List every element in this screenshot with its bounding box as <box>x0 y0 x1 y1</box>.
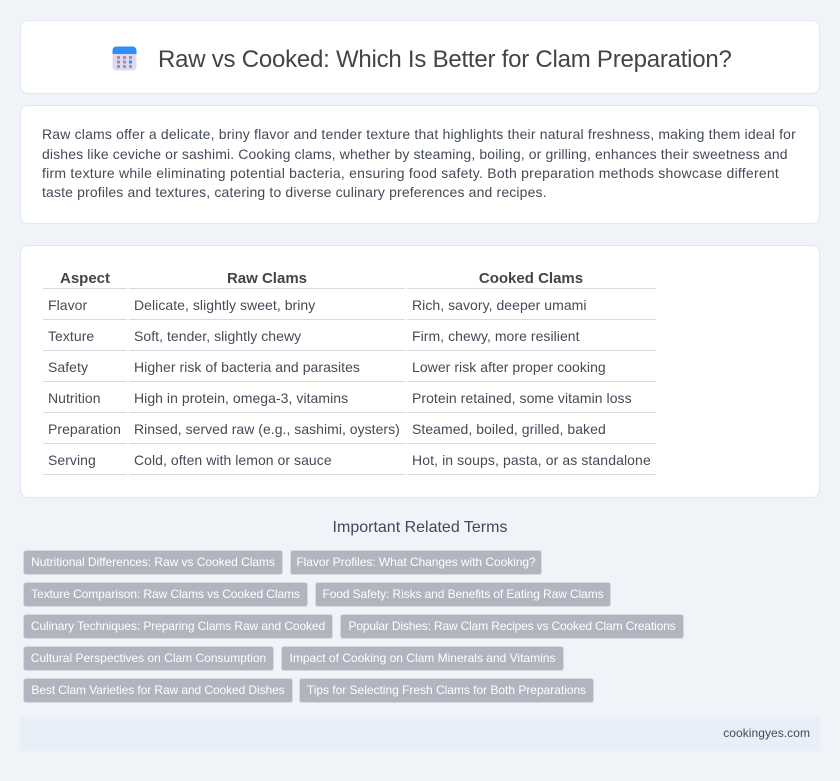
table row: flavor: Delicate, slightly sweet, briny <box>134 297 315 313</box>
table row: texture <box>48 328 580 344</box>
header panel <box>20 20 820 94</box>
tag: Tips for Selecting Fresh Clams for Both Preparations <box>307 683 586 697</box>
tag <box>290 550 542 575</box>
table row: texture: Texture <box>48 328 94 344</box>
intro paragraph: dishes like ceviche or sashimi. Cooking clams, whether by steaming, boiling, or grilling, enhances their sweetness and <box>42 146 788 162</box>
table row: texture: Soft, tender, slightly chewy <box>134 328 301 344</box>
tag <box>315 582 611 607</box>
table row: serving: Serving <box>48 452 96 468</box>
tag: Impact of Cooking on Clam Minerals and Vitamins <box>290 651 555 665</box>
tag: Popular Dishes: Raw Clam Recipes vs Cooked Clam Creations <box>348 619 676 633</box>
table row: nutrition <box>48 390 632 406</box>
table row: safety: Higher risk of bacteria and parasites <box>134 359 360 375</box>
tag: Food Safety: Risks and Benefits of Eating Raw Clams <box>322 587 604 601</box>
tag <box>23 582 308 607</box>
intro paragraph: firm texture while eliminating potential bacteria, ensuring food safety. Both preparation methods showcase different <box>42 165 779 181</box>
tag <box>23 678 293 703</box>
tag: Cultural Perspectives on Clam Consumption <box>31 651 266 665</box>
table header: Cooked Clams <box>479 270 583 287</box>
table row: safety <box>48 359 606 375</box>
tag <box>281 646 564 671</box>
table row: nutrition: High in protein, omega-3, vitamins <box>134 390 348 406</box>
intro paragraph: Raw clams offer a delicate, briny flavor and tender texture that highlights their natural freshness, making them ideal for <box>42 126 796 142</box>
table row: nutrition: Protein retained, some vitamin loss <box>412 390 632 406</box>
tag: Flavor Profiles: What Changes with Cooking? <box>296 555 536 569</box>
table row: preparation: Preparation <box>48 421 121 437</box>
tag: Texture Comparison: Raw Clams vs Cooked Clams <box>31 587 300 601</box>
tag <box>23 550 283 575</box>
tag list <box>23 550 684 703</box>
related terms heading: Important Related Terms <box>333 519 507 536</box>
table row: safety: Safety <box>48 359 88 375</box>
footer bar <box>20 717 820 751</box>
table row: flavor: Rich, savory, deeper umami <box>412 297 587 313</box>
table row: safety: Lower risk after proper cooking <box>412 359 606 375</box>
table row: preparation: Steamed, boiled, grilled, baked <box>412 421 606 437</box>
title: Raw vs Cooked: Which Is Better for Clam Preparation? <box>158 46 732 73</box>
tag: Best Clam Varieties for Raw and Cooked Dishes <box>31 683 285 697</box>
icon: calendar <box>112 46 136 70</box>
intro paragraph: taste profiles and textures, catering to diverse culinary preferences and recipes. <box>42 184 547 200</box>
tag: Nutritional Differences: Raw vs Cooked Clams <box>31 555 275 569</box>
panel: comparison table <box>20 245 820 498</box>
tag <box>299 678 594 703</box>
tag <box>23 646 274 671</box>
table row: flavor <box>48 297 587 313</box>
table header: Raw Clams <box>227 270 307 287</box>
tag: Culinary Techniques: Preparing Clams Raw and Cooked <box>31 619 325 633</box>
intro paragraph <box>42 126 796 200</box>
table header <box>60 270 583 287</box>
tag <box>340 614 684 639</box>
tag <box>23 614 333 639</box>
table header: Aspect <box>60 270 110 287</box>
table row: preparation <box>48 421 606 437</box>
table row: preparation: Rinsed, served raw (e.g., sashimi, oysters) <box>134 421 400 437</box>
footer source text: cookingyes.com <box>723 726 810 740</box>
table row: nutrition: Nutrition <box>48 390 101 406</box>
table row: flavor: Flavor <box>48 297 87 313</box>
table row: serving <box>48 452 651 468</box>
table row: serving: Cold, often with lemon or sauce <box>134 452 332 468</box>
panel: intro text <box>20 105 820 224</box>
table row: texture: Firm, chewy, more resilient <box>412 328 580 344</box>
table row: serving: Hot, in soups, pasta, or as standalone <box>412 452 651 468</box>
